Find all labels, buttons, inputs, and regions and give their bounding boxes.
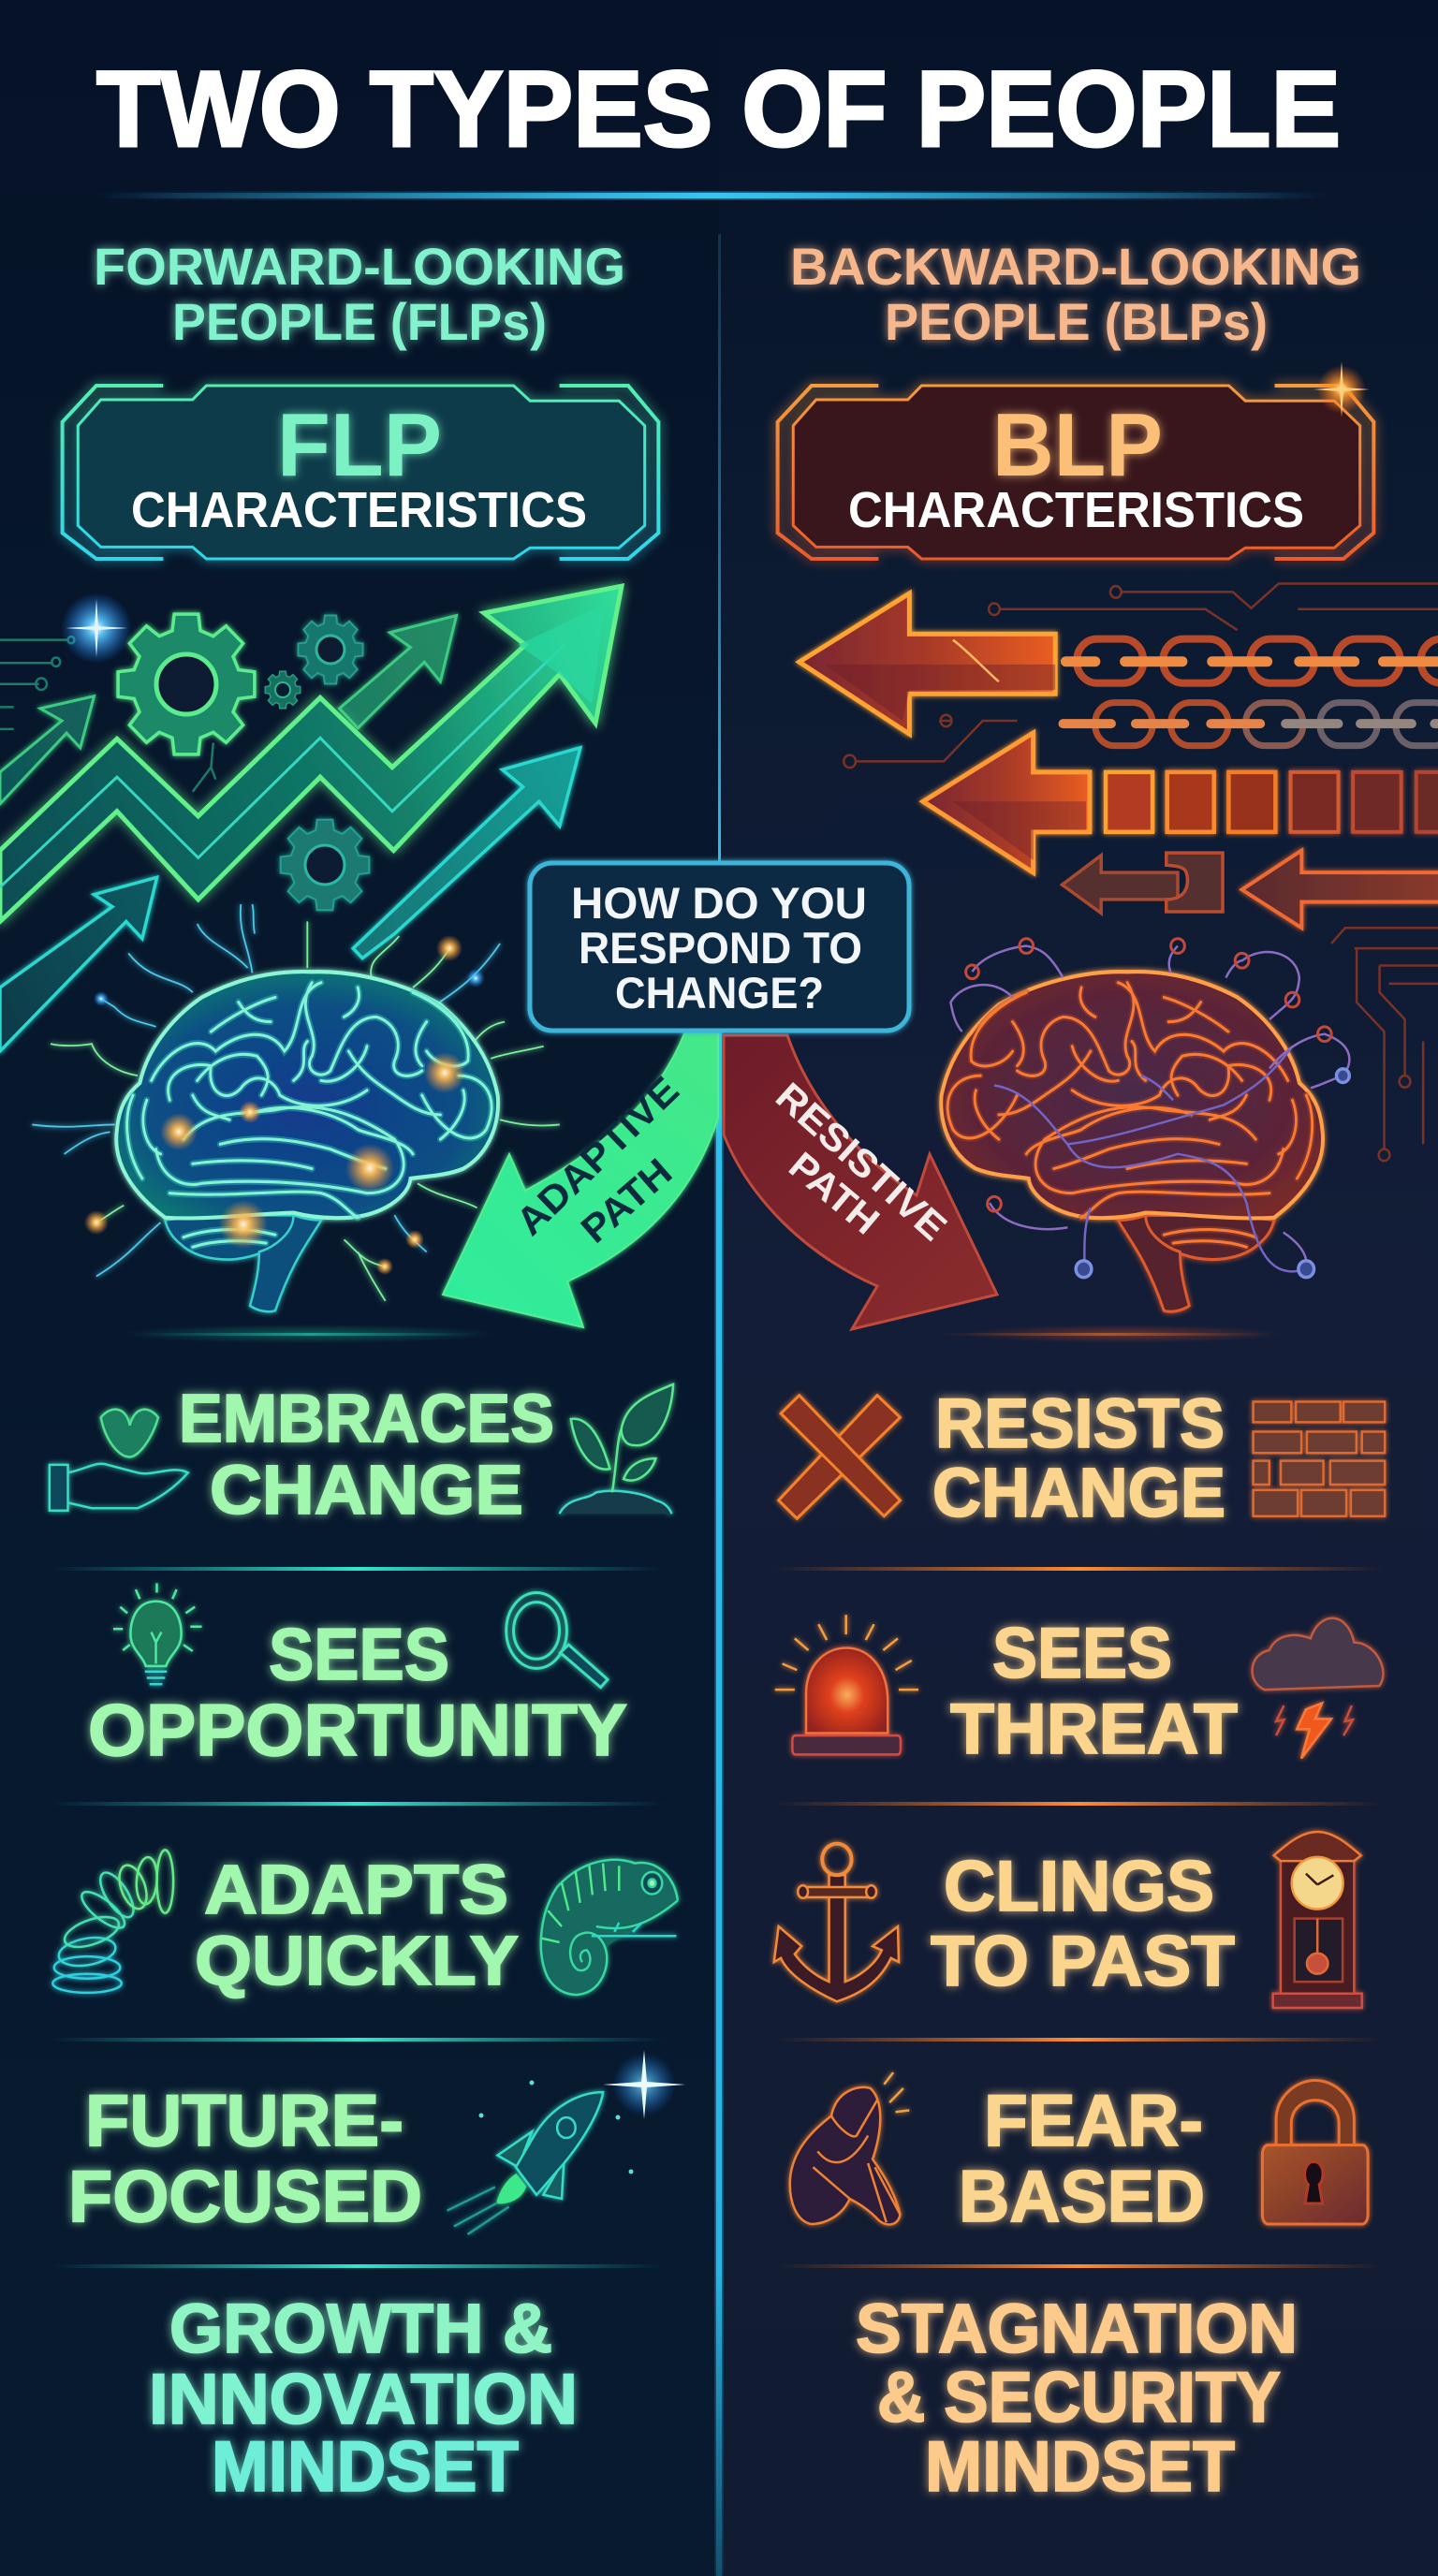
brain wires and padlocks	[950, 939, 1349, 1278]
arrow: resistive path	[724, 1035, 997, 1329]
row: resists change	[779, 1384, 1385, 1531]
arrow one	[800, 593, 1055, 734]
heading: backward-looking people: PEOPLE (BLPs)	[885, 292, 1268, 351]
BLP label: BLP	[992, 395, 1163, 495]
icon: grandfather clock	[1273, 1832, 1362, 2008]
row: adapts quickly	[52, 1850, 678, 1999]
lower arrow	[1242, 851, 1438, 928]
text	[950, 1614, 1238, 1769]
icon: lower gear	[281, 820, 369, 910]
text: TO PAST	[931, 1922, 1235, 2001]
icon: storm cloud	[1253, 1618, 1383, 1759]
text: SEES	[992, 1614, 1172, 1693]
text: FEAR-	[984, 2079, 1203, 2161]
icon: hand with leaf	[50, 1410, 188, 1511]
text	[68, 2079, 422, 2237]
heading: backward-looking people	[790, 237, 1361, 351]
icon: chameleon	[541, 1860, 678, 1995]
closing statement: growth and innovation mindset	[149, 2290, 578, 2507]
illustration: backward arrows and chains	[800, 584, 1438, 1161]
text: CHANGE	[932, 1454, 1225, 1531]
FLP label: FLP	[277, 395, 442, 495]
FLP characteristics label: CHARACTERISTICS	[131, 482, 587, 538]
closing statement: growth and innovation mindset: INNOVATION	[149, 2360, 578, 2439]
icon: padlock	[1262, 2081, 1368, 2224]
icon: brick wall	[1254, 1401, 1385, 1516]
circuit traces right	[844, 584, 1438, 1161]
brain sparks	[84, 935, 485, 1275]
circuit traces left	[0, 637, 215, 792]
dividers between rows	[51, 1333, 1384, 2268]
center divider line	[716, 234, 722, 2576]
path label: PATH	[573, 1150, 680, 1251]
text	[931, 1847, 1235, 2001]
icon: spring	[52, 1850, 173, 1993]
arrow two with broken blocks	[923, 733, 1438, 872]
chain top	[1065, 639, 1438, 683]
text: FUTURE-	[85, 2079, 404, 2161]
text	[932, 1384, 1225, 1531]
text: QUICKLY	[195, 1922, 519, 1999]
text	[959, 2079, 1205, 2237]
text: RESISTS	[935, 1384, 1225, 1462]
text: CLINGS	[944, 1847, 1214, 1926]
row: embraces change	[50, 1382, 673, 1529]
main zigzag arrow	[0, 586, 622, 921]
icon: crouching figure	[790, 2072, 909, 2224]
row: sees opportunity	[88, 1583, 627, 1771]
callout: how do you respond to change: RESPOND TO	[579, 923, 862, 973]
text: EMBRACES	[179, 1382, 554, 1456]
chain bottom	[1064, 703, 1438, 746]
icon: tiny gear	[265, 671, 301, 709]
text: ADAPTS	[204, 1851, 508, 1928]
heading: forward-looking people: PEOPLE (FLPs)	[172, 292, 547, 351]
closing statement: stagnation and security mindset	[856, 2290, 1298, 2507]
icon: corner flare	[1313, 361, 1370, 417]
callout: how do you respond to change: CHANGE?	[615, 968, 824, 1017]
text	[179, 1382, 554, 1529]
panel: BLP characteristics	[778, 361, 1373, 559]
closing statement: growth and innovation mindset: MINDSET	[212, 2427, 519, 2507]
lightning tendrils	[32, 904, 560, 1301]
small green arrow upper	[0, 616, 457, 804]
icon: medium gear	[299, 616, 362, 683]
callout: how do you respond to change	[530, 863, 909, 1031]
path label: PATH	[781, 1144, 888, 1243]
row: future-focused	[68, 2050, 685, 2237]
icon: alarm light	[775, 1615, 918, 1754]
title: TWO TYPES OF PEOPLE	[96, 50, 1341, 169]
icon: rocket	[448, 2092, 603, 2234]
closing statement: stagnation and security mindset: MINDSET	[925, 2427, 1235, 2507]
text: SEES	[269, 1613, 449, 1695]
row: clings to past	[774, 1832, 1362, 2008]
text: OPPORTUNITY	[88, 1689, 627, 1771]
illustration: strained BLP brain	[941, 939, 1349, 1343]
blocked arrow	[1063, 853, 1223, 914]
heading: backward-looking people: BACKWARD-LOOKING	[790, 237, 1361, 296]
teal arrow right	[0, 748, 580, 1051]
text	[195, 1851, 519, 1999]
heading: forward-looking people	[94, 237, 625, 351]
icon: blue flare	[61, 593, 132, 664]
heading: forward-looking people: FORWARD-LOOKING	[94, 237, 625, 296]
callout: how do you respond to change: HOW DO YOU	[571, 878, 867, 928]
resistive label: RESISTIVE	[768, 1075, 955, 1249]
text: CHANGE	[210, 1451, 523, 1529]
closing statement: stagnation and security mindset: & SECURITY	[877, 2358, 1281, 2437]
closing statement: growth and innovation mindset: GROWTH &	[169, 2290, 552, 2367]
panel: FLP characteristics	[63, 386, 658, 559]
adaptive label: ADAPTIVE	[507, 1068, 687, 1243]
icon: crossed bars	[779, 1396, 900, 1518]
title divider	[94, 193, 1329, 198]
brain body	[941, 972, 1323, 1311]
icon: sprout	[560, 1384, 673, 1514]
arrow: adaptive path	[443, 1032, 718, 1327]
BLP characteristics label: CHARACTERISTICS	[848, 482, 1304, 538]
closing statement: stagnation and security mindset: STAGNATION	[856, 2290, 1298, 2367]
text: BASED	[959, 2155, 1205, 2237]
illustration: glowing FLP brain	[32, 904, 560, 1343]
text: FOCUSED	[68, 2155, 422, 2237]
row: fear-based	[790, 2072, 1368, 2237]
icon: sparkle star	[479, 2050, 685, 2174]
row: sees threat	[775, 1614, 1383, 1769]
icon: large gear	[118, 614, 255, 754]
illustration: rising arrows and gears	[0, 586, 622, 1051]
text: THREAT	[950, 1690, 1238, 1769]
icon: light bulb	[113, 1583, 202, 1684]
icon: anchor	[774, 1844, 899, 2001]
brain body	[116, 972, 498, 1311]
icon: magnifying glass	[506, 1592, 608, 1688]
text	[88, 1613, 627, 1771]
